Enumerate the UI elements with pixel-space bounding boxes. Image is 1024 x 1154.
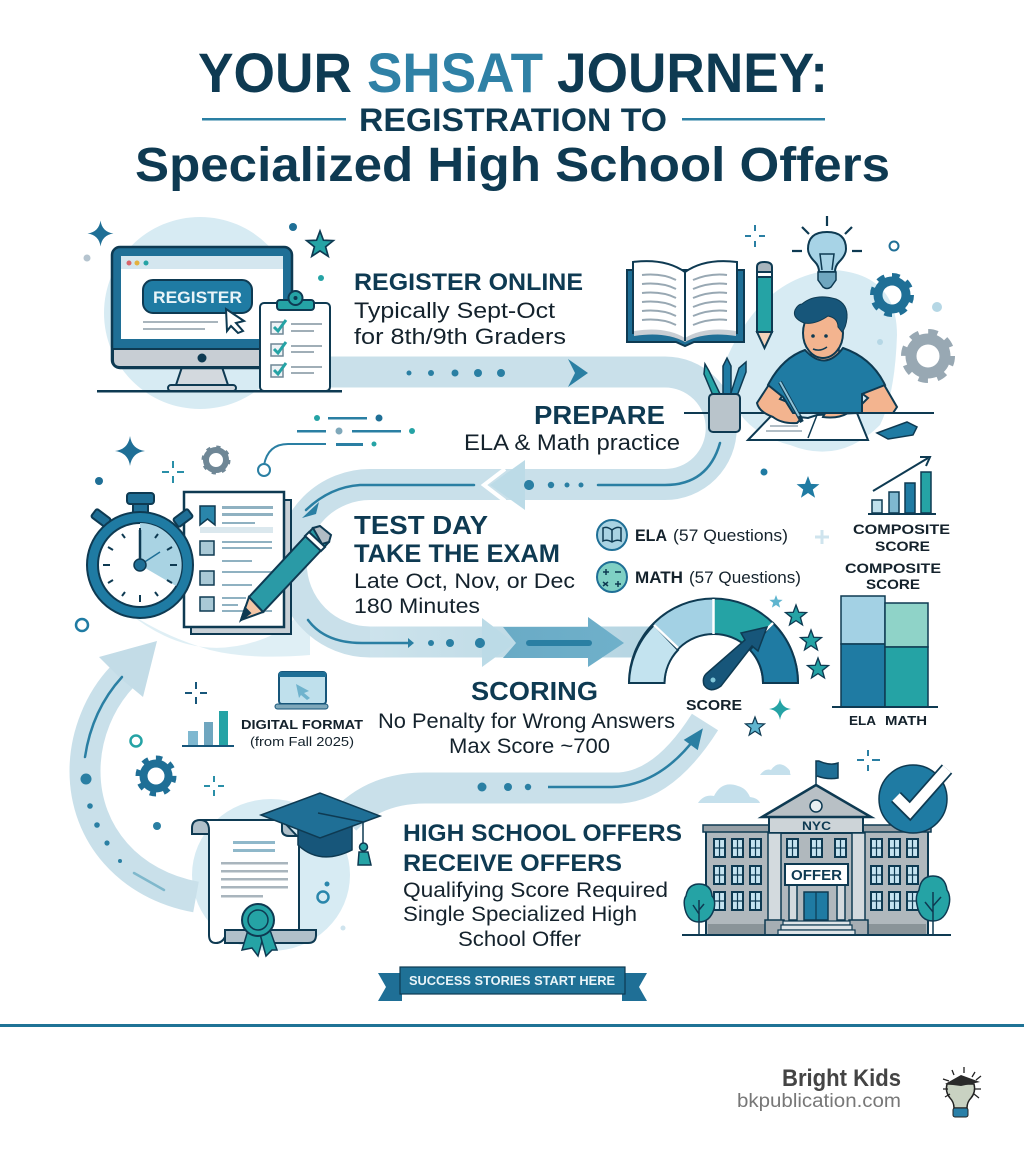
- plus decoration: [815, 530, 829, 544]
- student head: [803, 308, 843, 358]
- icon: pencil: [757, 262, 772, 348]
- arrow: to gauge: [475, 617, 624, 667]
- text: high school offers: [403, 820, 682, 951]
- diploma seal: [242, 930, 264, 956]
- icon: light bulb: [792, 216, 862, 288]
- icon: pencil on paper: [241, 526, 331, 620]
- text: scoring: Max Score ~700: [449, 735, 610, 758]
- icon: student studying: [684, 297, 934, 440]
- title line 1: YOUR: [198, 41, 352, 104]
- ground line: [682, 934, 951, 936]
- register button label: REGISTER: [153, 288, 242, 307]
- text: high school offers: School Offer: [458, 928, 581, 951]
- footer divider: [0, 1024, 1024, 1027]
- decorations: middle left: [76, 436, 228, 631]
- icon: pencil cup: [704, 358, 746, 432]
- chart: digital format bars: [182, 682, 234, 747]
- banner: success stories: SUCCESS STORIES START HERE: [409, 973, 615, 988]
- chart: composite score mini bars: COMPOSITE: [853, 521, 950, 537]
- chart: composite score mini bars: [853, 457, 950, 554]
- text: prepare: [464, 400, 680, 455]
- ribbon: diploma loop: [85, 677, 196, 897]
- chart: score gauge: [629, 598, 798, 714]
- icon: graduation cap: [261, 793, 380, 865]
- icon: clouds: [698, 764, 791, 803]
- icon: diploma: [192, 820, 316, 956]
- arrow: third ribbon thin head and dots: [408, 638, 485, 648]
- icon: gears and sparkles: [745, 225, 952, 380]
- banner: success stories: [378, 967, 647, 1001]
- text: test day: 180 Minutes: [354, 595, 480, 618]
- pen: [780, 382, 802, 422]
- footer brand: bkpublication.com: [737, 1091, 901, 1112]
- text: high school offers: Qualifying Score Required: [403, 879, 668, 902]
- text: high school offers: HIGH SCHOOL OFFERS: [403, 820, 682, 847]
- legend: MATH: (57 Questions): [689, 568, 801, 587]
- columns: [765, 833, 868, 935]
- chart: composite score stacked bars: MATH: [885, 713, 927, 728]
- offer sign: [785, 864, 848, 885]
- icon: school building: OFFER: [791, 868, 843, 884]
- legend: MATH: MATH: [635, 568, 683, 587]
- legend: ELA: [597, 520, 788, 550]
- ribbon: prepare to test day: [291, 484, 665, 642]
- student arms: [757, 383, 802, 423]
- text: high school offers: RECEIVE OFFERS: [403, 850, 622, 877]
- icon: register computer: [97, 247, 342, 392]
- chart: composite score mini bars: SCORE: [875, 538, 930, 554]
- title: [135, 41, 890, 192]
- portico: [769, 817, 863, 833]
- title line 1: SHSAT: [367, 41, 543, 104]
- background blobs: [104, 217, 897, 951]
- text: register online: for 8th/9th Graders: [354, 324, 566, 349]
- text: digital format: DIGITAL FORMAT: [241, 717, 363, 732]
- legend: ELA: ELA: [635, 526, 667, 545]
- icon: open book: [627, 261, 744, 346]
- text: digital format: (from Fall 2025): [250, 735, 354, 749]
- decorative lines and connector: [258, 414, 415, 476]
- text: register online: [354, 269, 583, 349]
- ribbon: offers back to test: [345, 722, 705, 820]
- stars around gauge: [745, 595, 828, 735]
- student shirt: [768, 348, 885, 413]
- icon: trees: [684, 876, 950, 935]
- decorations: lower left: [130, 736, 346, 930]
- arrow: second ribbon head: [302, 460, 534, 518]
- icon: check badge: [879, 765, 947, 833]
- icon: test paper: [184, 492, 291, 634]
- title line 1: JOURNEY:: [557, 41, 828, 104]
- text: test day: TAKE THE EXAM: [354, 540, 560, 568]
- journey path ribbons: [85, 372, 721, 897]
- chart: composite score stacked bars: [832, 560, 941, 728]
- ribbon dots and lines: [80, 359, 588, 863]
- icon: stopwatch: [87, 493, 193, 618]
- chart: composite score stacked bars: SCORE: [866, 576, 920, 592]
- gauge label: SCORE: [686, 697, 742, 714]
- text: test day: [354, 510, 575, 618]
- title line 3: Specialized High School Offers: [135, 139, 890, 192]
- icon: clipboard: [260, 291, 330, 391]
- windows: [714, 839, 918, 910]
- phone: [877, 422, 917, 439]
- steps: [778, 921, 855, 935]
- ribbon: test day to scoring: [370, 626, 650, 658]
- plus decoration: [857, 750, 880, 771]
- icon: school building: NYC: [802, 819, 831, 833]
- arrow: loop arrowhead: [99, 641, 157, 697]
- text: register online: Typically Sept-Oct: [354, 298, 555, 323]
- ribbon thin arrows: [85, 443, 720, 890]
- text: test day: TEST DAY: [354, 510, 488, 540]
- text: register online: REGISTER ONLINE: [354, 269, 583, 296]
- flag: [816, 761, 838, 785]
- gauge needle: [703, 627, 767, 690]
- legend: ELA: (57 Questions): [673, 526, 788, 545]
- title line 1: [198, 41, 828, 104]
- text: high school offers: Single Specialized High: [403, 903, 637, 926]
- dot decoration: [760, 468, 768, 476]
- arrow: offers to score: [548, 731, 701, 787]
- star decoration: [797, 476, 819, 498]
- text: prepare: ELA & Math practice: [464, 430, 680, 455]
- footer brand: Bright Kids: [782, 1065, 901, 1092]
- title line 2: REGISTRATION TO: [359, 102, 667, 138]
- open notebook: [748, 413, 868, 440]
- icon: school building: [682, 761, 951, 936]
- footer brand: [737, 1065, 901, 1112]
- text: scoring: [378, 676, 675, 758]
- text: prepare: PREPARE: [534, 400, 665, 430]
- text: test day: Late Oct, Nov, or Dec: [354, 570, 575, 593]
- door: [804, 892, 828, 920]
- text: scoring: SCORING: [471, 676, 598, 706]
- icon: laptop: [275, 672, 328, 709]
- arrow: top chevron: [568, 359, 588, 387]
- chart: composite score stacked bars: COMPOSITE: [845, 560, 941, 576]
- decorations: top left: [84, 220, 333, 281]
- footer logo bulb: [943, 1067, 981, 1117]
- legend: MATH: [597, 562, 801, 592]
- text: scoring: No Penalty for Wrong Answers: [378, 710, 675, 733]
- chart: composite score stacked bars: ELA: [849, 713, 877, 728]
- student neck: [811, 345, 839, 364]
- text: digital format: [241, 717, 363, 749]
- ribbon: register to prepare: [330, 372, 721, 485]
